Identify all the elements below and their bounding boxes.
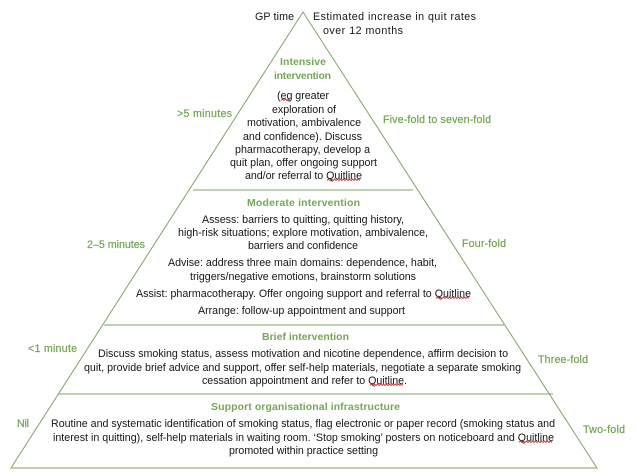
text block: infrastructure details: promoted within practice setting xyxy=(229,445,378,457)
column header: estimated increase in quit rates xyxy=(313,11,476,37)
heading: brief intervention: Brief intervention xyxy=(262,331,349,343)
heading: intensive intervention: intervention xyxy=(274,70,331,82)
text block: brief details: cessation appointment and refer to Quitline. xyxy=(202,375,407,387)
text block: intensive details: and confidence). Discuss xyxy=(243,131,362,143)
text block: intensive details: exploration of xyxy=(272,104,336,116)
heading: intensive intervention xyxy=(274,56,331,82)
quit rate label: three-fold: Three-fold xyxy=(538,354,588,366)
text block: infrastructure details: interest in quitting), self-help materials in waiting room. ‘Stop smoking’ posters on noticeboard and Quitline xyxy=(53,432,554,444)
text block: brief details: Discuss smoking status, assess motivation and nicotine dependence, affirm decision to xyxy=(98,348,508,360)
quit rate label: two-fold: Two-fold xyxy=(583,424,625,436)
text block: intensive details: and/or referral to Quitline xyxy=(245,170,362,182)
text block: assess: barriers and confidence xyxy=(248,240,358,252)
text block: advise xyxy=(168,257,437,283)
heading: moderate intervention: Moderate intervention xyxy=(247,197,360,209)
column header: estimated increase in quit rates: Estimated increase in quit rates xyxy=(313,11,476,23)
text block: advise: Advise: address three main domains: dependence, habit, xyxy=(168,257,437,269)
panel: support organisational infrastructure xyxy=(17,401,625,457)
panel: intensive intervention xyxy=(177,56,491,182)
heading: intensive intervention: Intensive xyxy=(280,56,326,68)
text block: assess xyxy=(178,214,428,252)
text block: intensive details: (eg greater xyxy=(277,90,329,102)
text block: arrange: Arrange: follow-up appointment and support xyxy=(198,305,405,317)
text block: intensive details: quit plan, offer ongoing support xyxy=(230,157,377,169)
text block: advise: triggers/negative emotions, brainstorm solutions xyxy=(190,271,416,283)
quit rate label: four-fold: Four-fold xyxy=(462,238,506,250)
text block: assist: Assist: pharmacotherapy. Offer ongoing support and referral to Quitline xyxy=(136,288,471,300)
text block: brief details: quit, provide brief advice and support, offer self-help materials, negotiate a separate smoking xyxy=(84,362,521,374)
GP time label: more than 5 minutes: >5 minutes xyxy=(177,108,232,120)
panel: moderate intervention xyxy=(87,197,506,317)
quit rate label: five-fold to seven-fold: Five-fold to seven-fold xyxy=(383,114,491,126)
text block: intensive details: pharmacotherapy, develop a xyxy=(235,144,370,156)
text block: intensive details xyxy=(230,90,377,182)
text block: intensive details: motivation, ambivalence xyxy=(247,117,361,129)
text block: brief details xyxy=(84,348,521,387)
column header: GP time: GP time xyxy=(255,11,294,23)
heading: support organisational infrastructure: Support organisational infrastructure xyxy=(211,401,400,413)
text block: infrastructure details xyxy=(51,418,555,457)
panel: brief intervention xyxy=(28,331,588,387)
column header: estimated increase in quit rates: over 12 months xyxy=(323,25,403,37)
text block: assess: Assess: barriers to quitting, quitting history, xyxy=(202,214,404,226)
GP time label: 2 to 5 minutes: 2–5 minutes xyxy=(87,239,145,251)
GP time label: nil: Nil xyxy=(17,418,29,430)
GP time label: less than 1 minute: <1 minute xyxy=(28,343,77,355)
text block: assess: high-risk situations; explore motivation, ambivalence, xyxy=(178,227,428,239)
text block: infrastructure details: Routine and systematic identification of smoking status, flag electronic or paper record (smoking status and xyxy=(51,418,555,430)
